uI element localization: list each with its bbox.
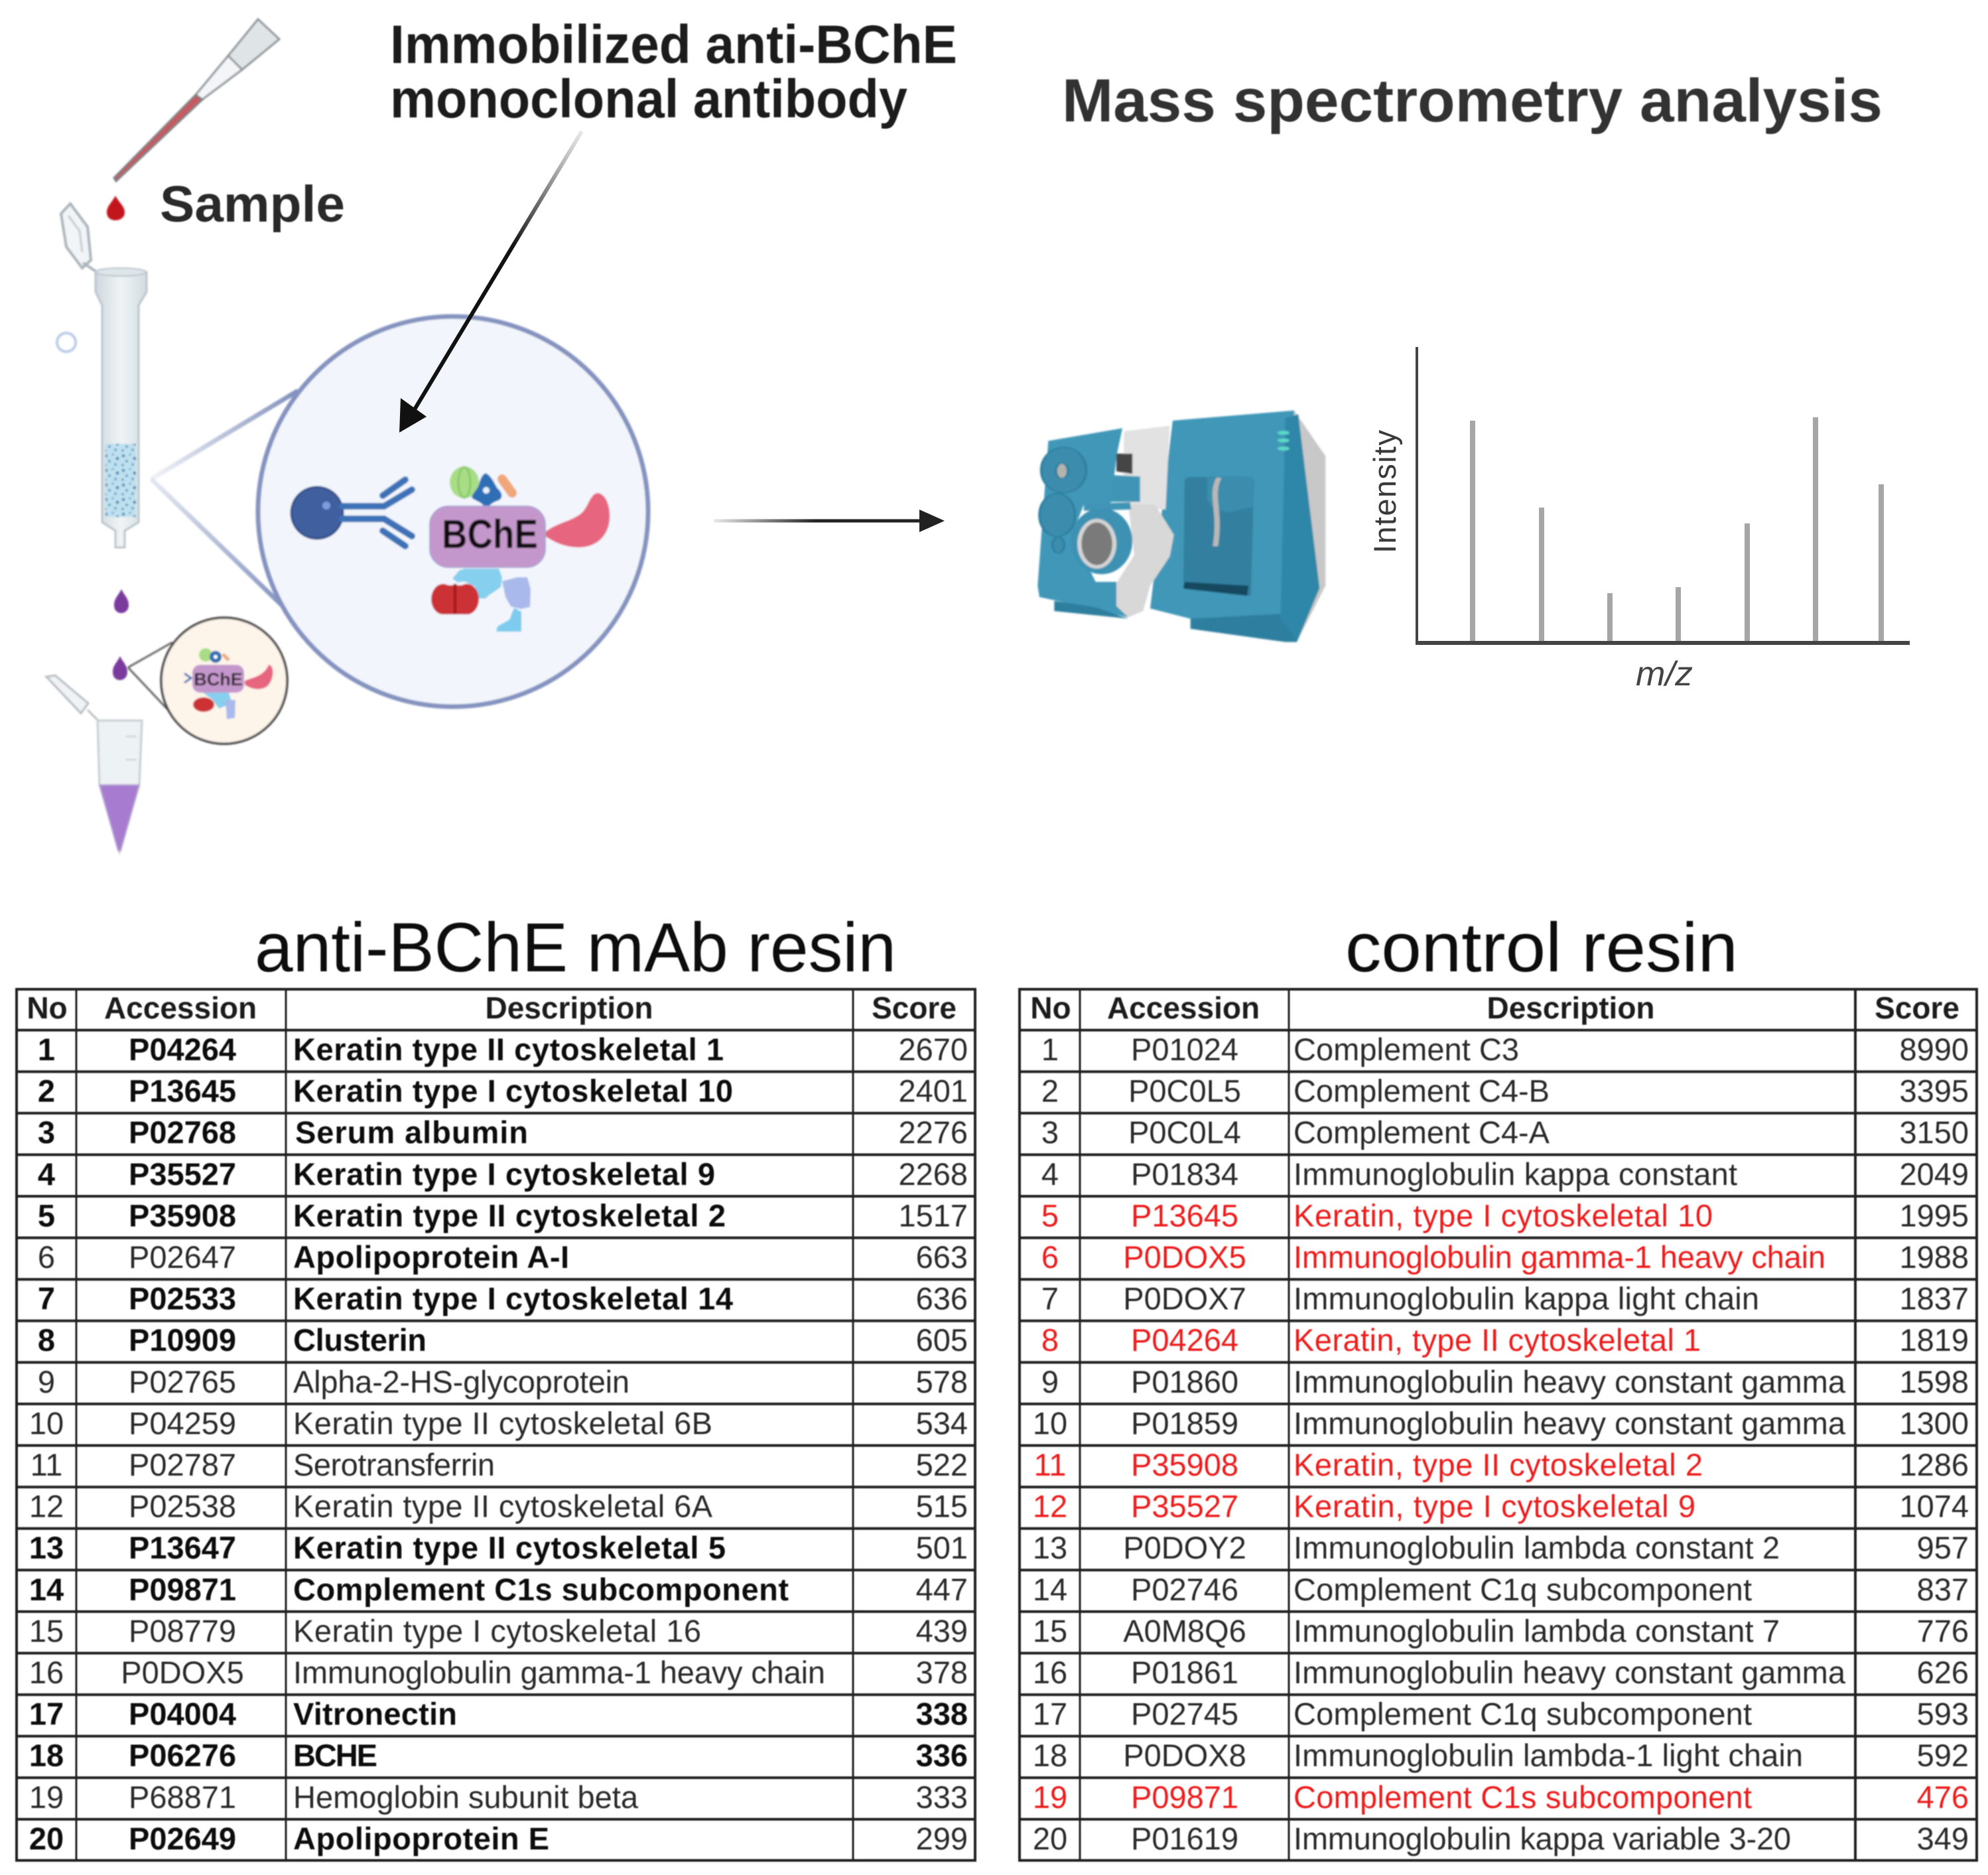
right table header: Score [1875,991,1959,1025]
row 15: 439 [916,1613,968,1648]
heading: control resin: control resin [1345,909,1738,987]
control row 3: Complement C4-A [1293,1115,1550,1150]
row 1: P04264 [129,1032,236,1067]
heading: immobilized antibody: Immobilized anti-BChE [390,15,957,75]
icon: periwinkle protein [502,577,531,609]
y axis label: Intensity [1367,430,1402,553]
row 16: P0DOX5 [121,1655,244,1690]
row 1 [38,1032,968,1067]
row 10: Keratin type II cytoskeletal 6B [293,1405,712,1440]
icon: immobilized antibody [291,480,412,546]
control row 7: 1837 [1899,1281,1969,1316]
icon: orange protein [502,479,512,493]
row 7: P02533 [129,1281,236,1316]
row 3 [38,1115,968,1150]
row 7: 7 [38,1281,55,1316]
control row 13: P0DOY2 [1123,1530,1246,1565]
control row 11: P35908 [1131,1447,1238,1482]
control row 19 [1033,1779,1969,1815]
row 7: 636 [916,1281,968,1316]
control row 10 [1033,1405,1969,1440]
row 20: Apolipoprotein E [293,1821,549,1856]
row 6: 6 [38,1239,55,1275]
row 15: Keratin type I cytoskeletal 16 [293,1613,701,1648]
row 2: Keratin type I cytoskeletal 10 [293,1074,733,1109]
row 13: 501 [916,1530,968,1565]
icon: purple drop 2 [113,656,127,680]
row 7 [38,1281,968,1316]
row 14: Complement C1s subcomponent [293,1572,789,1607]
row 16: Immunoglobulin gamma-1 heavy chain [293,1655,825,1690]
left table header: No [27,991,68,1025]
row 2: 2 [38,1074,55,1109]
row 17: P04004 [129,1697,236,1732]
icon: red sample drop [107,196,125,220]
control row 10: 10 [1033,1405,1067,1440]
box: BChE: BChE [442,512,538,557]
control row 9: Immunoglobulin heavy constant gamma [1293,1364,1846,1399]
control row 14: Complement C1q subcomponent [1293,1572,1752,1607]
control row 19: P09871 [1131,1779,1238,1815]
row 8: Clusterin [293,1322,427,1357]
left table grid [17,989,975,1860]
control row 17: Complement C1q subcomponent [1293,1697,1752,1732]
box: BChE [430,506,545,567]
control row 12: 12 [1033,1489,1067,1524]
left table header: Score [872,991,957,1025]
right table header: Accession [1107,991,1260,1025]
icon: light blue foot [496,608,521,632]
icon: spin column [61,204,147,547]
control row 20: 20 [1033,1821,1067,1856]
row 11 [31,1447,968,1482]
row 9: Alpha-2-HS-glycoprotein [293,1364,630,1399]
control row 7 [1041,1281,1969,1316]
row 17: Vitronectin [293,1697,457,1732]
control row 14: P02746 [1131,1572,1238,1607]
control row 16: 626 [1917,1655,1969,1690]
row 1: 1 [38,1032,55,1067]
control row 7: P0DOX7 [1123,1281,1246,1316]
row 7: Keratin type I cytoskeletal 14 [293,1281,733,1316]
row 19 [29,1779,968,1815]
control row 14 [1033,1572,1969,1607]
row 10: 10 [29,1405,64,1440]
icon: mass spectrometer [1037,411,1325,642]
row 13 [29,1530,968,1565]
control row 9: 9 [1041,1364,1059,1399]
row 2 [38,1074,968,1109]
control row 5: P13645 [1131,1198,1238,1233]
arrow: to mass spectrometer [714,510,945,532]
row 2: 2401 [898,1074,968,1109]
row 6: Apolipoprotein A-I [293,1239,569,1275]
control row 10: 1300 [1899,1405,1969,1440]
control row 3 [1041,1115,1969,1150]
control row 16: Immunoglobulin heavy constant gamma [1293,1655,1846,1690]
heading: immobilized antibody: monoclonal antibody [390,69,907,129]
control row 20: P01619 [1131,1821,1238,1856]
row 4 [38,1156,968,1192]
row 17 [29,1697,968,1732]
control row 20 [1033,1821,1969,1856]
icon: small bubble [57,333,76,352]
control row 3: P0C0L4 [1128,1115,1241,1150]
control row 17: 17 [1033,1697,1067,1732]
control row 6: 6 [1041,1239,1059,1275]
row 4: Keratin type I cytoskeletal 9 [293,1156,715,1192]
control row 9 [1041,1364,1969,1399]
row 12: 515 [916,1489,968,1524]
control row 16 [1033,1655,1969,1690]
row 17: 338 [916,1697,968,1732]
row 6: P02647 [129,1239,236,1275]
row 11: 522 [916,1447,968,1482]
row 16: 16 [29,1655,64,1690]
control row 13 [1033,1530,1969,1565]
row 4: P35527 [129,1156,236,1192]
icon: green protein [450,466,479,498]
panel: zoomed resin circle [258,316,648,707]
control row 1: P01024 [1131,1032,1238,1067]
control row 5: 1995 [1899,1198,1969,1233]
control row 18: 18 [1033,1738,1067,1773]
control row 16: 16 [1033,1655,1067,1690]
control row 1: 1 [1041,1032,1059,1067]
control row 6: P0DOX5 [1123,1239,1246,1275]
control row 4: P01834 [1131,1156,1238,1192]
control row 2: 3395 [1899,1074,1969,1109]
row 9: 9 [38,1364,55,1399]
control row 15 [1033,1613,1969,1648]
row 4: 4 [38,1156,55,1192]
row 15: 15 [29,1613,64,1648]
row 1: 2670 [898,1032,968,1067]
control row 15: A0M8Q6 [1123,1613,1246,1648]
control row 9: 1598 [1899,1364,1969,1399]
right table header: Description [1487,991,1655,1025]
control row 7: 7 [1041,1281,1059,1316]
label: Sample: Sample [160,176,345,233]
row 12: 12 [29,1489,64,1524]
row 1: Keratin type II cytoskeletal 1 [293,1032,724,1067]
icon: light blue protein [452,569,502,598]
row 12: P02538 [129,1489,236,1524]
row 20 [29,1821,968,1856]
row 10: P04259 [129,1405,236,1440]
control row 15: Immunoglobulin lambda constant 7 [1293,1613,1780,1648]
row 18: 336 [916,1738,968,1773]
row 14: 14 [29,1572,64,1607]
heading: immobilized antibody [390,15,957,129]
row 9: 578 [916,1364,968,1399]
row 8: 605 [916,1322,968,1357]
row 11: P02787 [129,1447,236,1482]
control row 8: 1819 [1899,1322,1969,1357]
left table header: Description [485,991,653,1025]
control row 15: 15 [1033,1613,1067,1648]
control row 20: 349 [1917,1821,1969,1856]
row 9 [38,1364,968,1399]
row 13: 13 [29,1530,64,1565]
icon: purple drop 1 [114,589,129,613]
chart: mass spectrum [1367,347,1910,693]
left table header [27,991,957,1025]
control row 1: 8990 [1899,1032,1969,1067]
row 5: P35908 [129,1198,236,1233]
heading: anti-BChE mAb resin: anti-BChE mAb resin [255,909,896,987]
control row 6: Immunoglobulin gamma-1 heavy chain [1293,1239,1825,1275]
row 20: 20 [29,1821,64,1856]
row 18: P06276 [129,1738,236,1773]
control row 18: P0DOX8 [1123,1738,1246,1773]
panel: eluate inset circle: BChE [194,669,243,689]
row 9: P02765 [129,1364,236,1399]
right table header: No [1030,991,1071,1025]
row 10: 534 [916,1405,968,1440]
row 3: P02768 [129,1115,236,1150]
x axis label: m/z [1636,655,1693,693]
row 15: P08779 [129,1613,236,1648]
arrow: antibody pointer [399,131,582,433]
control row 1 [1041,1032,1969,1067]
row 10 [29,1405,968,1440]
control row 17: 593 [1917,1697,1969,1732]
control row 18: 592 [1917,1738,1969,1773]
row 5 [38,1198,968,1233]
control row 13: 957 [1917,1530,1969,1565]
control row 9: P01860 [1131,1364,1238,1399]
row 19: P68871 [129,1779,236,1815]
row 3: 3 [38,1115,55,1150]
control row 18: Immunoglobulin lambda-1 light chain [1293,1738,1803,1773]
control row 5: Keratin, type I cytoskeletal 10 [1293,1198,1713,1233]
row 11: Serotransferrin [293,1447,495,1482]
control row 5: 5 [1041,1198,1059,1233]
row 12: Keratin type II cytoskeletal 6A [293,1489,713,1524]
row 8: P10909 [129,1322,236,1357]
row 13: Keratin type II cytoskeletal 5 [293,1530,726,1565]
row 14: P09871 [129,1572,236,1607]
left table header: Accession [104,991,257,1025]
wedge lines to small circle [128,642,172,715]
zoom wedge lines [151,391,298,612]
icon: collection tube [46,675,142,852]
row 11: 11 [31,1447,62,1482]
control row 15: 776 [1917,1613,1969,1648]
row 20: 299 [916,1821,968,1856]
icon: pipette tip with sample [114,19,279,181]
panel: eluate inset circle [161,618,287,744]
control row 14: 14 [1033,1572,1067,1607]
control row 11 [1034,1447,1969,1482]
control row 11: 11 [1034,1447,1066,1482]
row 8 [38,1322,968,1357]
control row 8: Keratin, type II cytoskeletal 1 [1293,1322,1701,1357]
control row 6: 1988 [1899,1239,1969,1275]
row 6: 663 [916,1239,968,1275]
icon: pink protein [545,493,610,547]
row 13: P13647 [129,1530,236,1565]
control row 4: Immunoglobulin kappa constant [1293,1156,1737,1192]
row 5: 5 [38,1198,55,1233]
table: control resin [1020,989,1977,1860]
control row 5 [1041,1198,1969,1233]
control row 12: P35527 [1131,1489,1238,1524]
row 18: 18 [29,1738,64,1773]
control row 19: 476 [1917,1779,1969,1815]
row 14: 447 [916,1572,968,1607]
control row 4: 2049 [1899,1156,1969,1192]
control row 12: 1074 [1899,1489,1969,1524]
row 19: 333 [916,1779,968,1815]
control row 10: Immunoglobulin heavy constant gamma [1293,1405,1846,1440]
control row 2: Complement C4-B [1293,1074,1550,1109]
control row 18 [1033,1738,1969,1773]
row 19: Hemoglobin subunit beta [293,1779,639,1815]
row 3: Serum albumin [295,1115,528,1150]
row 5: Keratin type II cytoskeletal 2 [293,1198,726,1233]
table: anti-BChE mAb resin [17,989,975,1860]
control row 3: 3150 [1899,1115,1969,1150]
row 19: 19 [29,1779,64,1815]
row 4: 2268 [898,1156,968,1192]
control row 3: 3 [1041,1115,1059,1150]
row 12 [29,1489,968,1524]
control row 4 [1041,1156,1969,1192]
icon: red protein [431,584,479,614]
icon: blue protein [472,473,501,506]
control row 2: 2 [1041,1074,1059,1109]
control row 2 [1041,1074,1969,1109]
row 6 [38,1239,968,1275]
control row 8: P04264 [1131,1322,1238,1357]
control row 11: Keratin, type II cytoskeletal 2 [1293,1447,1703,1482]
control row 6 [1041,1239,1969,1275]
row 18: BCHE [293,1738,377,1773]
control row 17 [1033,1697,1969,1732]
control row 2: P0C0L5 [1128,1074,1241,1109]
control row 14: 837 [1917,1572,1969,1607]
control row 13: Immunoglobulin lambda constant 2 [1293,1530,1780,1565]
row 14 [29,1572,968,1607]
control row 12: Keratin, type I cytoskeletal 9 [1293,1489,1695,1524]
row 16 [29,1655,968,1690]
control row 1: Complement C3 [1293,1032,1519,1067]
row 20: P02649 [129,1821,236,1856]
control row 19: 19 [1033,1779,1067,1815]
right table grid [1020,989,1977,1860]
row 18 [29,1738,968,1773]
right table header [1030,991,1959,1025]
control row 8: 8 [1041,1322,1059,1357]
control row 11: 1286 [1899,1447,1969,1482]
control row 16: P01861 [1131,1655,1238,1690]
control row 13: 13 [1033,1530,1067,1565]
control row 12 [1033,1489,1969,1524]
control row 20: Immunoglobulin kappa variable 3-20 [1293,1821,1791,1856]
heading: mass spectrometry analysis: Mass spectrometry analysis [1062,67,1883,135]
axes [1416,347,1910,645]
row 16: 378 [916,1655,968,1690]
row 2: P13645 [129,1074,236,1109]
row 15 [29,1613,968,1648]
control row 8 [1041,1322,1969,1357]
row 3: 2276 [898,1115,968,1150]
panel: affinity column workflow [46,19,648,852]
peaks [1473,417,1881,642]
control row 17: P02745 [1131,1697,1238,1732]
control row 19: Complement C1s subcomponent [1293,1779,1752,1815]
row 17: 17 [29,1697,64,1732]
control row 4: 4 [1041,1156,1059,1192]
row 8: 8 [38,1322,55,1357]
row 5: 1517 [898,1198,968,1233]
control row 10: P01859 [1131,1405,1238,1440]
control row 7: Immunoglobulin kappa light chain [1293,1281,1759,1316]
